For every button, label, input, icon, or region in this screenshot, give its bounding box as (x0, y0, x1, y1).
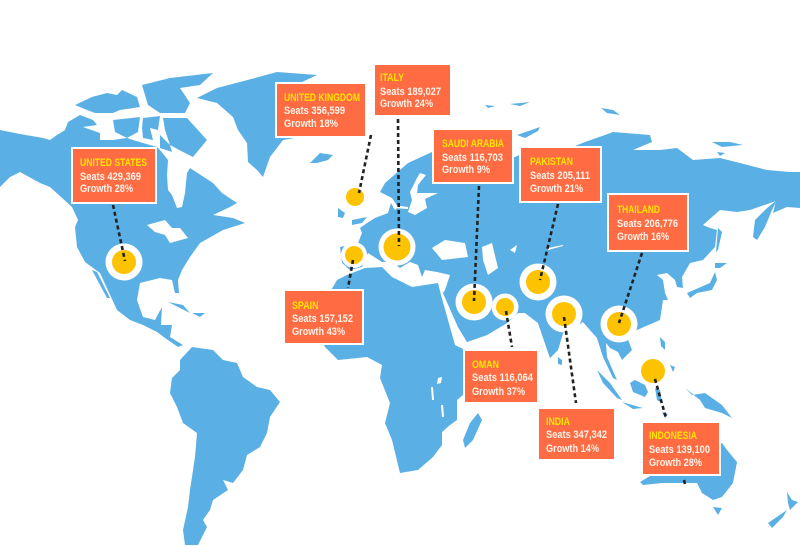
dot: united states (106, 244, 142, 280)
arctic russia islands (485, 102, 743, 156)
new guinea (685, 388, 732, 418)
label: indonesia (642, 422, 720, 475)
arctic islands (75, 73, 213, 157)
leader line: united states (113, 205, 125, 261)
aral sea (510, 245, 517, 253)
label: pakistan: PAKISTAN (530, 156, 573, 168)
caspian sea (482, 243, 498, 275)
north america (0, 115, 245, 347)
label: italy: Seats 189,027 (380, 86, 441, 98)
dot: indonesia (641, 359, 665, 383)
africa (310, 267, 500, 473)
label: india: Growth 14% (546, 443, 599, 455)
caribbean islands (168, 302, 205, 317)
label: pakistan (520, 147, 601, 202)
black sea (432, 240, 468, 260)
leader line: thailand (619, 253, 642, 323)
label: indonesia: Seats 139,100 (649, 444, 710, 456)
label: saudi arabia: Growth 9% (442, 164, 490, 176)
eurasia (340, 132, 800, 380)
leader line: indonesia (655, 379, 666, 418)
label: thailand: Growth 16% (617, 231, 669, 243)
label: spain: SPAIN (292, 300, 318, 312)
dot: oman (492, 294, 518, 320)
australia (640, 443, 737, 500)
leader line: spain (348, 260, 353, 288)
label: thailand: Seats 206,776 (617, 218, 678, 230)
leader line tail: indonesia (684, 480, 685, 484)
label: india: Seats 347,342 (546, 429, 607, 441)
label: united states: Growth 28% (80, 183, 133, 195)
baja california (92, 270, 110, 298)
label: united kingdom: Growth 18% (284, 118, 338, 130)
label: saudi arabia: SAUDI ARABIA (442, 138, 504, 150)
label: oman: Seats 116,064 (472, 372, 534, 384)
label: spain: Growth 43% (292, 326, 345, 338)
label: oman: Growth 37% (472, 386, 525, 398)
leader line: saudi arabia (474, 186, 479, 301)
label: spain: Seats 157,152 (292, 313, 353, 325)
leader line: oman (506, 311, 512, 347)
lake balkhash (548, 245, 563, 250)
label: italy: Growth 24% (380, 98, 433, 110)
label: oman (464, 350, 538, 403)
dot: india (546, 296, 582, 332)
label: united states: UNITED STATES (80, 157, 147, 169)
dot: saudi arabia (456, 284, 492, 320)
leader line: italy (398, 119, 399, 246)
label: united states: Seats 429,369 (80, 171, 141, 183)
greenland (197, 72, 317, 177)
label: thailand: THAILAND (617, 204, 660, 216)
label: united kingdom: Seats 356,599 (284, 105, 345, 117)
iceland (310, 153, 333, 163)
label: india: INDIA (546, 416, 570, 428)
dot: italy (378, 228, 416, 266)
leader line: pakistan (540, 204, 558, 280)
label: italy (374, 64, 451, 116)
label: thailand (608, 194, 688, 251)
south america (170, 347, 280, 545)
label: united kingdom: UNITED KINGDOM (284, 92, 360, 104)
label: saudi arabia: Seats 116,703 (442, 152, 503, 164)
baltic sea (393, 173, 438, 215)
britain and ireland (338, 208, 367, 225)
label: indonesia: Growth 28% (649, 457, 702, 469)
label: indonesia: INDONESIA (649, 430, 697, 442)
dot: pakistan (520, 264, 556, 300)
african lakes (431, 377, 444, 417)
label: united kingdom (276, 83, 366, 137)
label: oman: OMAN (472, 359, 499, 371)
southeast asia islands (558, 337, 675, 418)
dot: thailand (600, 306, 638, 342)
japan and sakhalin (687, 228, 727, 298)
tasmania (713, 507, 722, 515)
leader line: united kingdom (359, 135, 371, 193)
india (525, 300, 597, 358)
label: italy: ITALY (380, 72, 404, 84)
new zealand (768, 492, 798, 528)
arabia (443, 285, 518, 342)
label: pakistan: Seats 205,111 (530, 170, 590, 182)
great lakes (147, 220, 188, 243)
label: india (538, 408, 615, 460)
dot: spain (341, 242, 367, 268)
dot: united kingdom (346, 188, 364, 206)
label: pakistan: Growth 21% (530, 183, 583, 195)
label: saudi arabia (433, 129, 513, 183)
seas and lakes (147, 173, 563, 417)
label: spain (284, 290, 363, 344)
label: united states (72, 148, 156, 203)
kamchatka (753, 200, 777, 240)
madagascar (463, 413, 482, 448)
leader line: india (564, 317, 576, 403)
